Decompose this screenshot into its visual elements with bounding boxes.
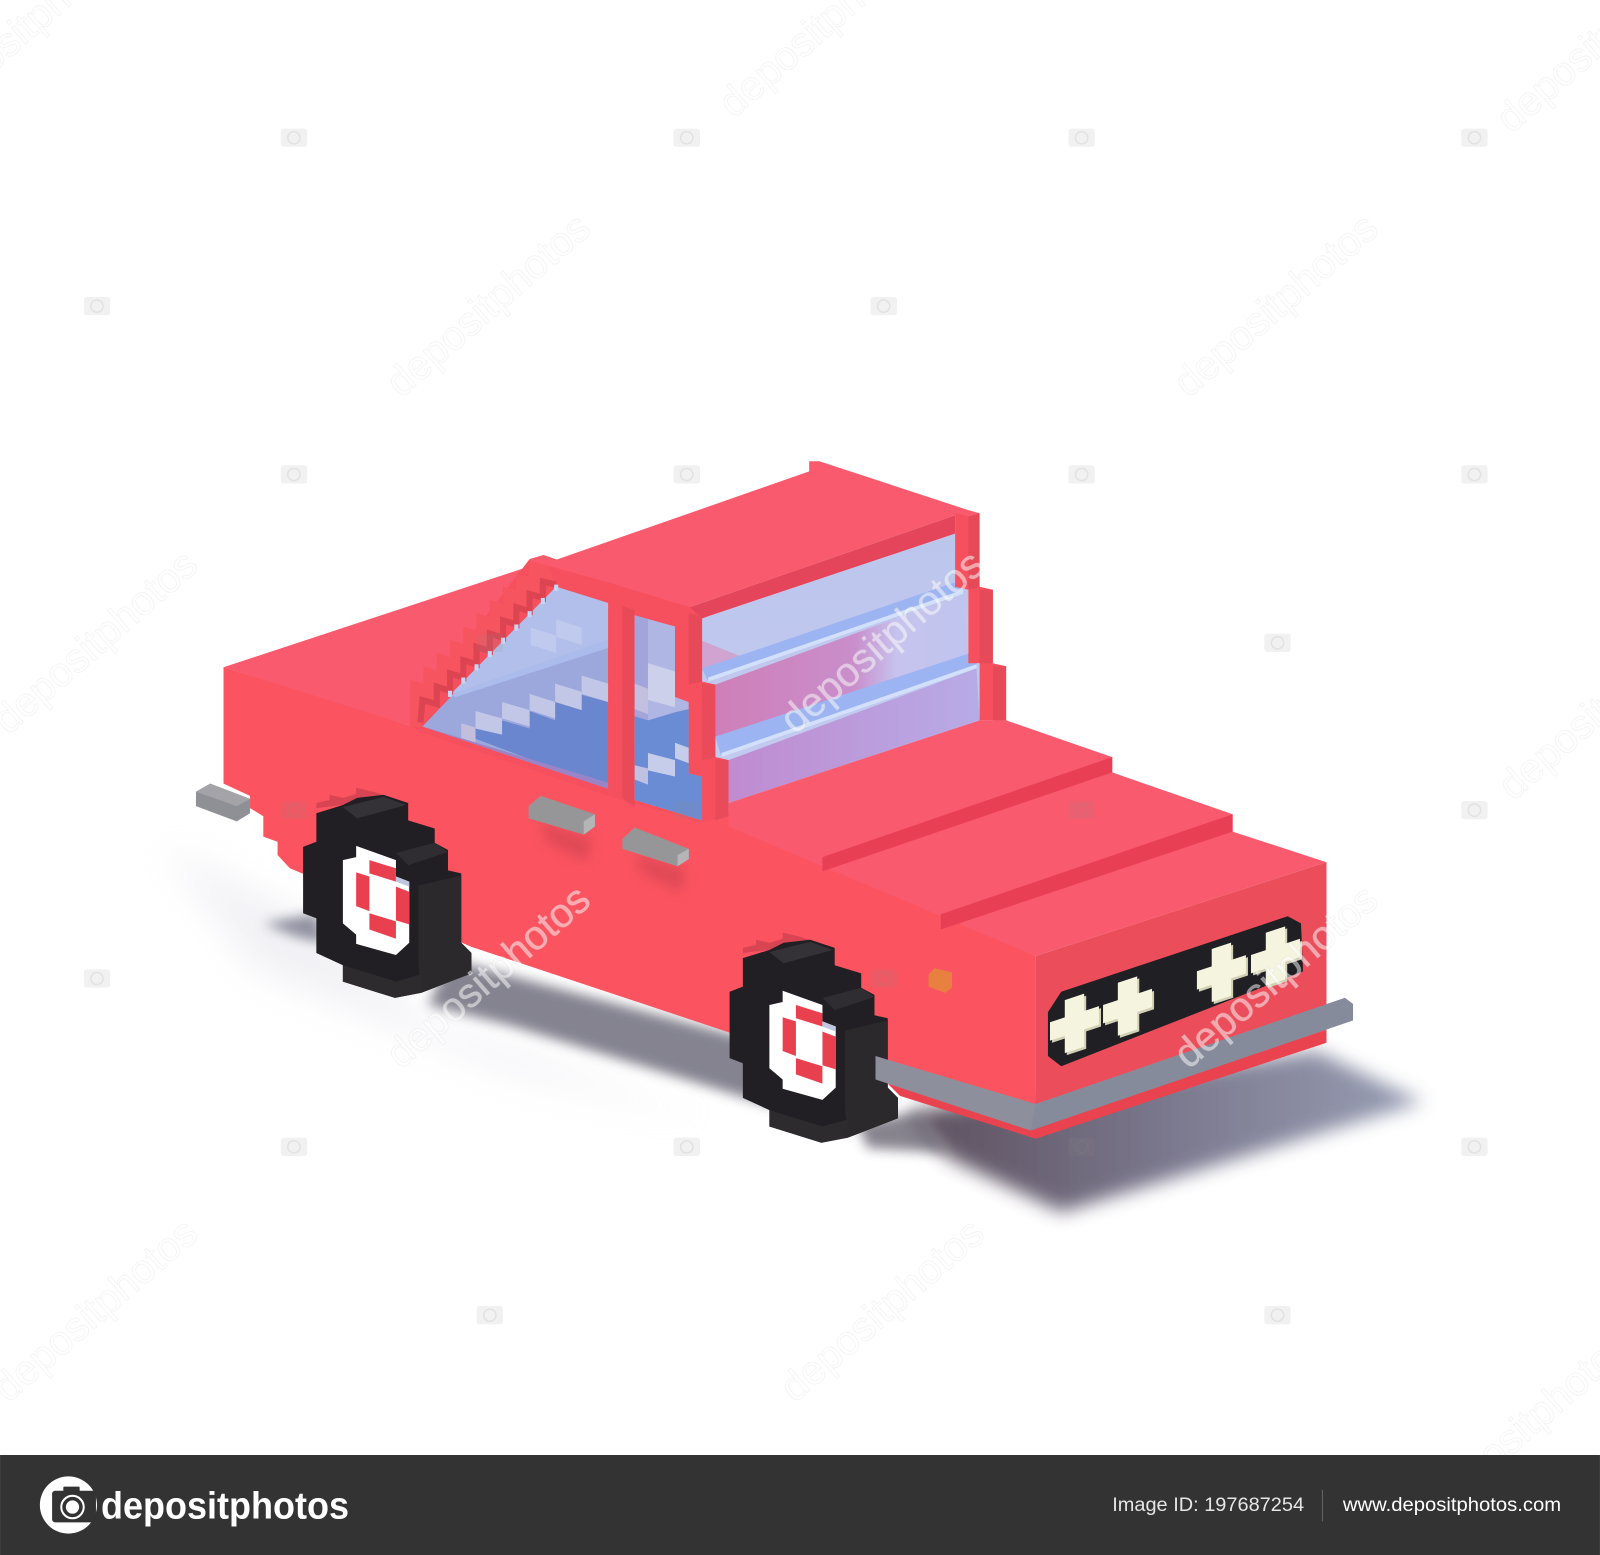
ground shadow [163, 847, 1423, 1212]
watermark text: depositphotos [771, 1209, 993, 1410]
front face [1036, 862, 1326, 1104]
side rear window [422, 587, 608, 789]
logo icon [40, 1476, 97, 1534]
body side [224, 667, 1036, 1107]
watermark text: depositphotos [377, 204, 599, 405]
windscreen frame [675, 513, 1006, 822]
cabin side panel [410, 555, 728, 822]
door handle shadows [541, 821, 686, 893]
rear deck top [224, 560, 571, 726]
windscreen [702, 534, 980, 803]
watermark text: depositphotos [377, 875, 599, 1077]
watermark text: depositphotos [1165, 204, 1386, 405]
watermark text: depositphotos [771, 541, 993, 742]
website: www.depositphotos.com [1342, 1494, 1561, 1516]
rear wheel [303, 788, 471, 998]
rear pillar steps [410, 555, 558, 726]
front bumper [876, 998, 1353, 1139]
front wheel [730, 933, 898, 1143]
side marker [929, 968, 952, 993]
door pillar [608, 601, 635, 808]
side front window [635, 615, 702, 820]
roof [529, 461, 980, 607]
logo text: depositphotos [101, 1484, 349, 1526]
grille [1048, 916, 1303, 1066]
watermark camera icons [84, 129, 1488, 1324]
image id: Image ID: 197687254 [1112, 1494, 1304, 1516]
footer bar [0, 1455, 1600, 1555]
hood [729, 720, 1326, 956]
watermark text: depositphotos [1165, 875, 1386, 1077]
headlights [1050, 921, 1302, 1060]
car [196, 461, 1353, 1143]
rear bumper [196, 784, 250, 821]
door handles [529, 796, 689, 866]
